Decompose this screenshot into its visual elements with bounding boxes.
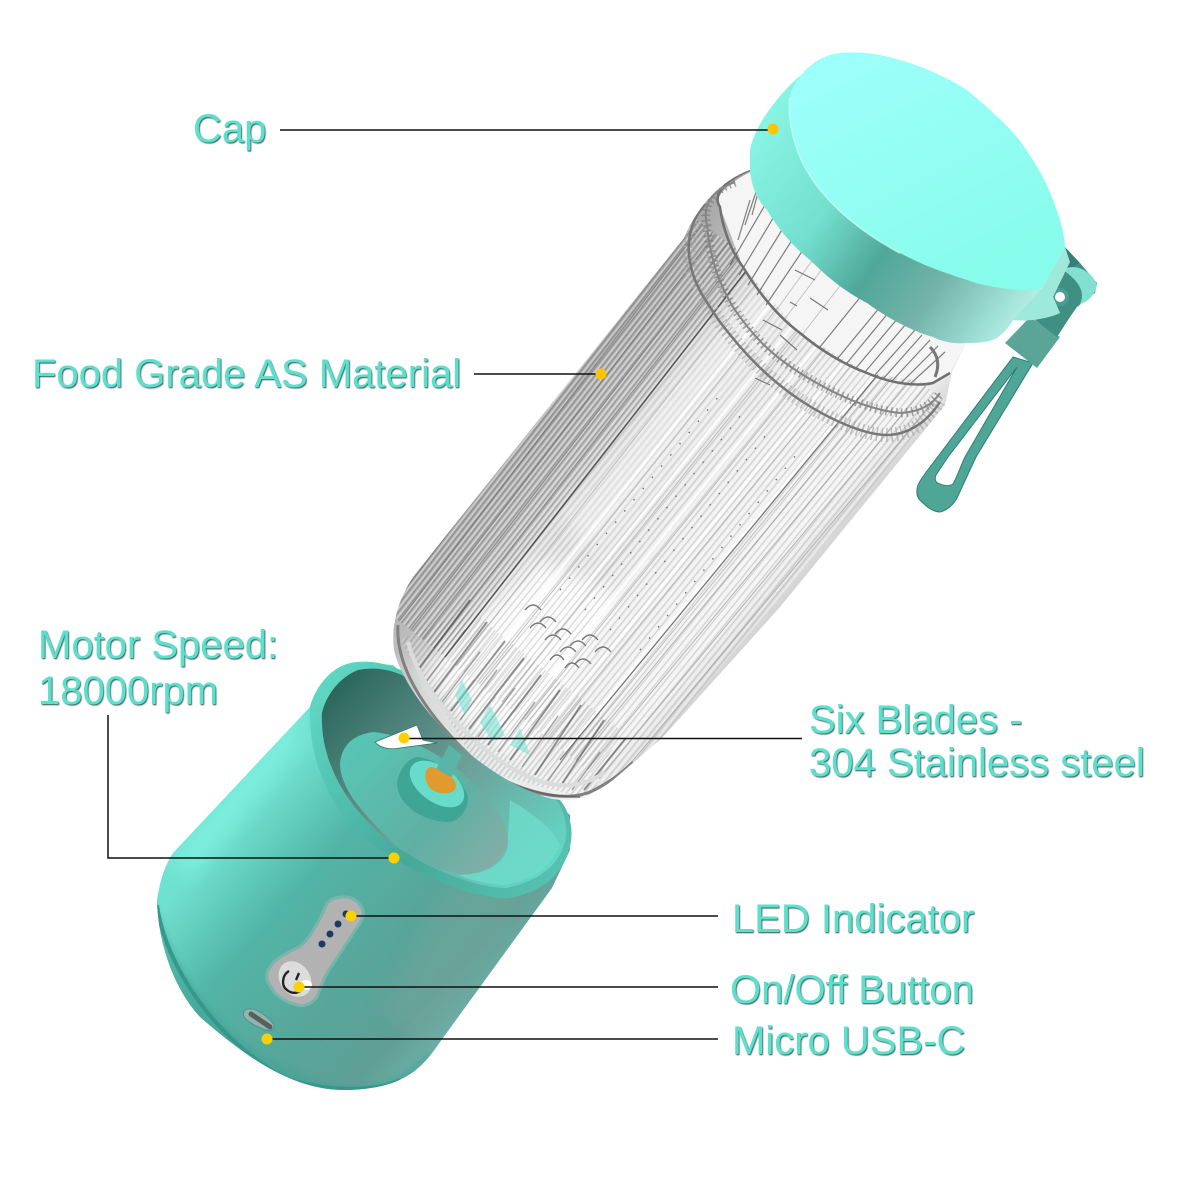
bright glass highlight xyxy=(425,560,620,760)
fine dark ribs left band xyxy=(388,215,754,657)
inner wall lighter side xyxy=(458,800,560,885)
callout: micro USB-C xyxy=(262,1019,965,1063)
mid ribs xyxy=(456,270,894,756)
callout: motor speed xyxy=(38,623,400,864)
callout: micro USB-C: Micro USB-C xyxy=(732,1019,965,1063)
blender base xyxy=(150,662,572,1110)
cap edge highlight xyxy=(789,97,900,253)
LED dots xyxy=(318,910,350,948)
callout: motor speed: Motor Speed: xyxy=(38,623,278,667)
callout: six blades: Six Blades - xyxy=(809,698,1022,742)
callout: six blades: 304 Stainless steel xyxy=(809,741,1145,785)
callout: on/off button xyxy=(294,968,974,1012)
neck opening xyxy=(718,172,967,383)
dark ribs, left side xyxy=(388,215,741,648)
hinge xyxy=(1047,247,1080,287)
base body xyxy=(157,662,570,1090)
shaft xyxy=(433,745,462,787)
teal reflections xyxy=(455,680,530,755)
spiky ribs near bottle bottom xyxy=(418,600,626,790)
scattered graduation dots xyxy=(560,395,800,650)
cap side wall xyxy=(750,55,1060,343)
bottle body xyxy=(393,170,967,800)
base opening xyxy=(322,669,566,888)
neck ribs xyxy=(730,185,945,384)
callout: motor speed: 18000rpm xyxy=(38,669,218,713)
callout: on/off button: On/Off Button xyxy=(730,968,974,1012)
orange coupling xyxy=(425,767,456,793)
strap xyxy=(917,247,1097,512)
callout: cap: Cap xyxy=(193,107,266,151)
fine light ribs xyxy=(445,261,945,792)
power button xyxy=(272,955,318,1003)
dark ribs, right side xyxy=(576,368,939,788)
cap top face xyxy=(790,52,1065,290)
callout: LED indicator: LED Indicator xyxy=(732,897,974,941)
cap xyxy=(750,52,1070,343)
callout: LED indicator xyxy=(346,897,974,941)
callout: six blades xyxy=(398,698,1145,785)
USB port xyxy=(243,1009,274,1031)
infographic: portable blender parts diagram xyxy=(35,52,1144,1090)
callout: cap xyxy=(193,107,778,151)
neck thread rings xyxy=(689,205,940,435)
motor hub xyxy=(397,757,468,822)
control panel xyxy=(267,897,363,1006)
measure ticks xyxy=(755,270,828,385)
base rim xyxy=(310,662,572,898)
inner disc xyxy=(340,732,507,874)
cap tab xyxy=(1013,247,1070,321)
bottle bottom rim xyxy=(398,625,633,796)
callout: food grade material: Food Grade AS Material xyxy=(32,352,461,396)
measuring marks xyxy=(525,605,611,668)
strap loop xyxy=(917,357,1033,512)
strap clip xyxy=(1005,317,1060,368)
glass bottle xyxy=(388,170,967,800)
blade xyxy=(375,725,437,749)
fine dark ribs bottom band xyxy=(400,610,620,800)
